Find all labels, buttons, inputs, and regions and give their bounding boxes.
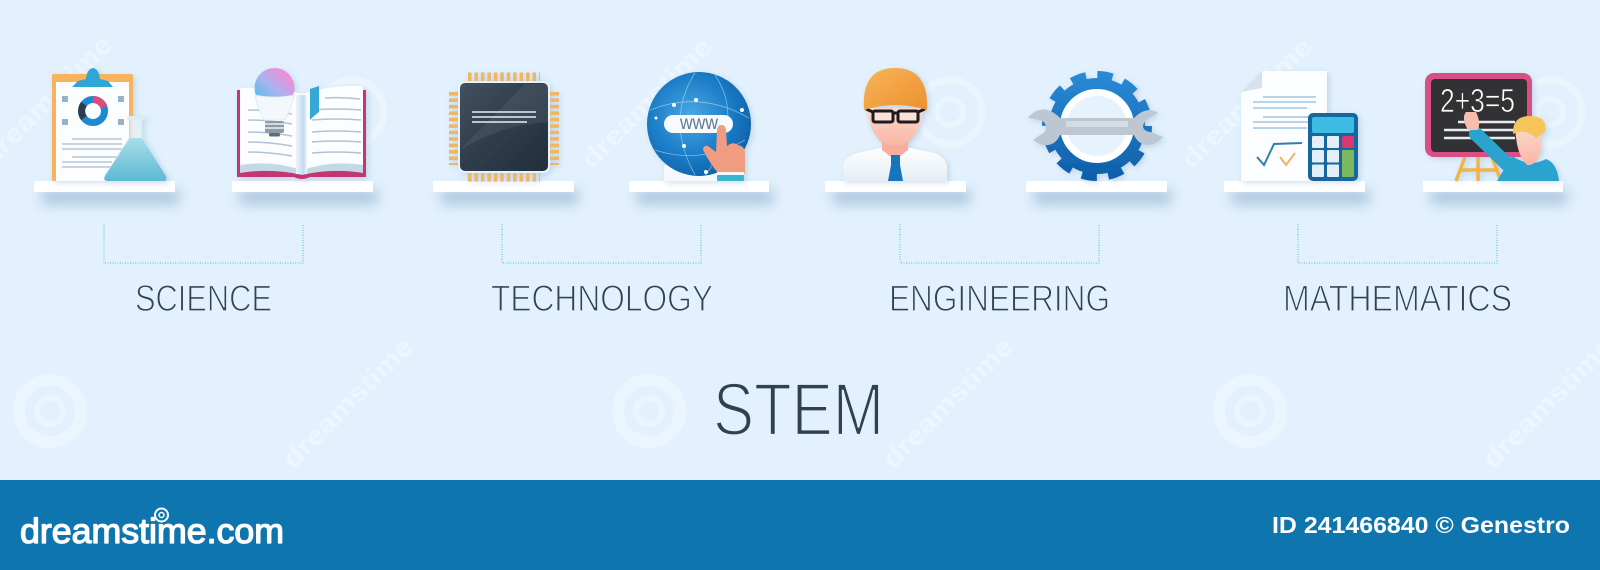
footer banner <box>0 480 1600 570</box>
glasses <box>866 109 925 122</box>
equation: 2+3=5 <box>1440 82 1515 119</box>
title: STEM <box>713 368 884 451</box>
icon: document with calculator <box>1241 71 1358 181</box>
icon: microchip <box>454 78 554 176</box>
footer credit: ID 241466840 © Genestro <box>1272 512 1570 538</box>
watermark swirls <box>19 80 1582 442</box>
donut chart <box>82 99 104 122</box>
hand <box>703 125 745 173</box>
label: science: SCIENCE <box>135 278 272 319</box>
icon: clipboard and flask <box>52 68 167 181</box>
helmet <box>864 68 927 110</box>
www button <box>664 115 733 133</box>
label: mathematics: MATHEMATICS <box>1283 278 1512 319</box>
flask <box>104 119 167 181</box>
label: engineering: ENGINEERING <box>889 278 1110 319</box>
easel <box>1456 157 1501 181</box>
bracket: engineering <box>900 224 1099 263</box>
bulb <box>254 68 294 108</box>
watermark text <box>0 29 1600 474</box>
bracket: science <box>104 224 303 263</box>
watermark text: dreamstime <box>1175 31 1318 174</box>
label: technology: TECHNOLOGY <box>491 278 713 319</box>
icon: engineer <box>843 68 947 181</box>
icon: gear with wrench <box>1028 76 1163 176</box>
shelves <box>34 181 1567 204</box>
clip <box>72 68 113 87</box>
teacher <box>1476 134 1510 167</box>
icon: globe with www button and hand <box>647 72 751 181</box>
icon: open book and light bulb <box>237 68 366 179</box>
calculator <box>1308 113 1358 181</box>
bookmark <box>310 86 319 120</box>
bracket: mathematics <box>1298 224 1497 263</box>
wrench <box>1028 110 1163 145</box>
watermark text: dreamstime <box>276 331 419 474</box>
bracket: technology <box>502 224 701 263</box>
tie <box>888 155 903 181</box>
footer logo: dreamstime.com <box>20 512 284 551</box>
icon: globe with www button and hand: www <box>679 113 718 134</box>
watermark text: dreamstime <box>575 31 718 174</box>
icon: chalkboard and teacher <box>1425 73 1559 181</box>
watermark text: dreamstime <box>876 331 1019 474</box>
